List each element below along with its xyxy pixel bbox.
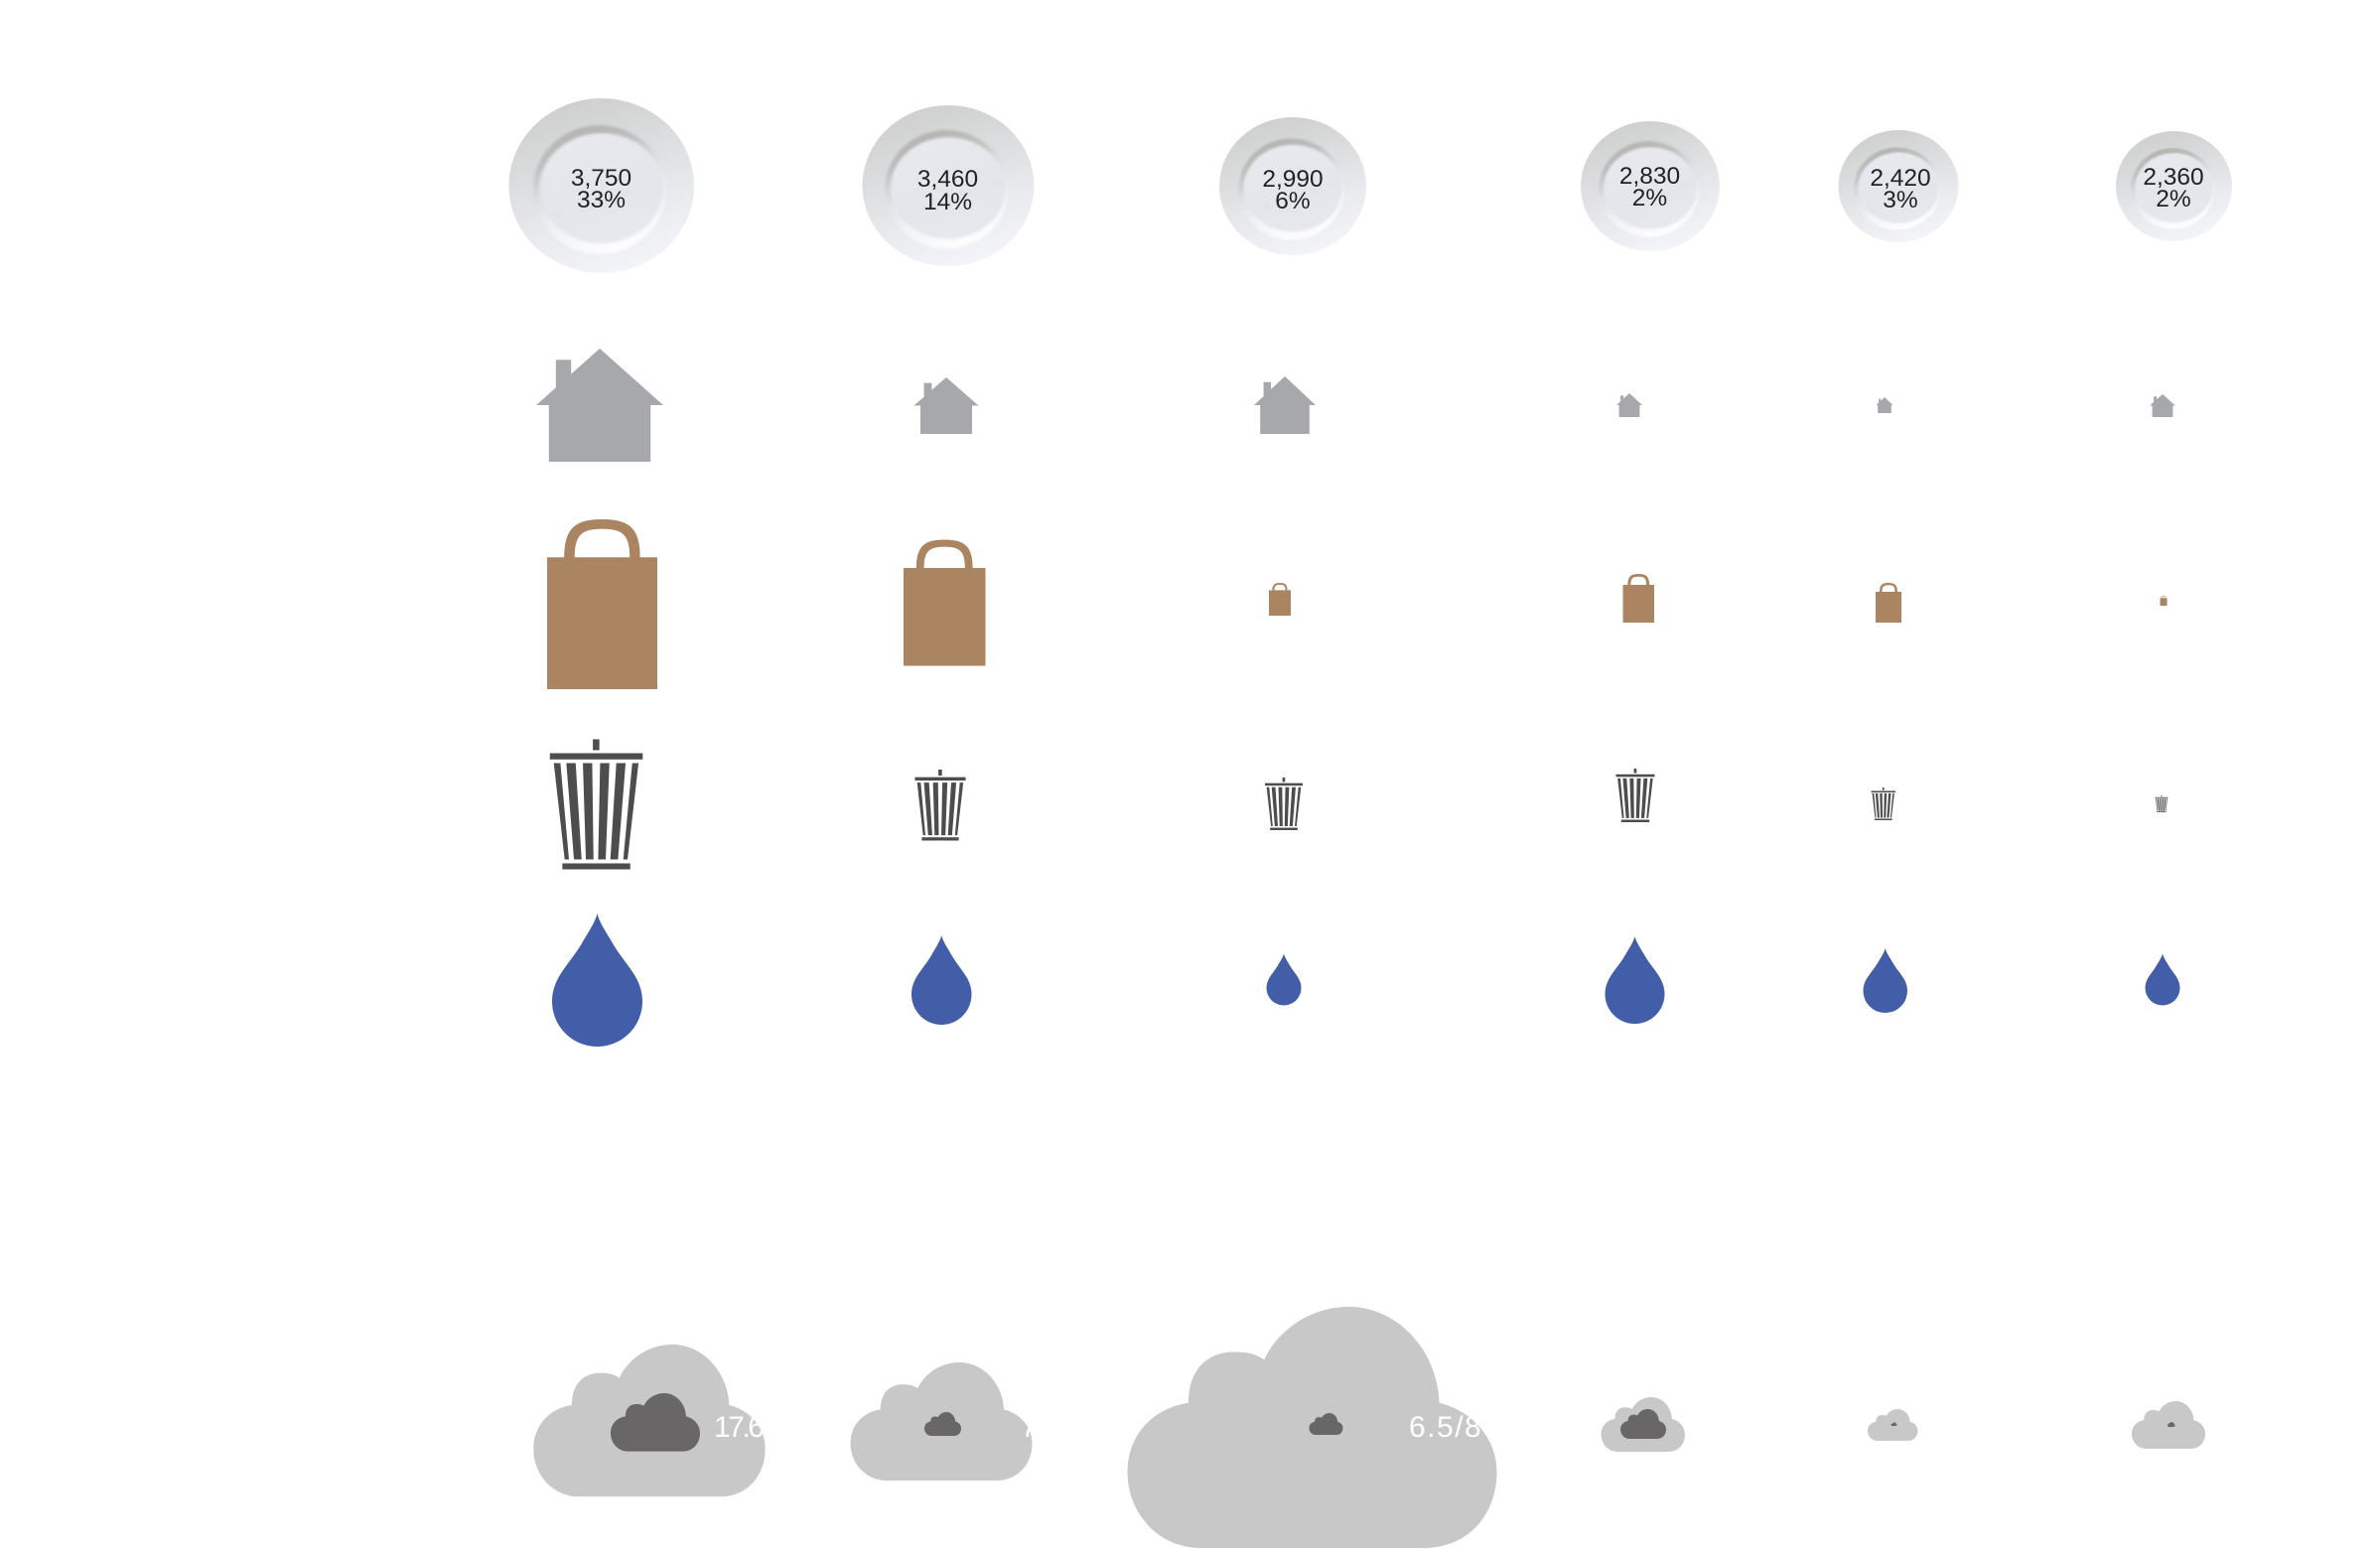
icon: trash can 6 xyxy=(2155,795,2169,812)
cloud 5 with inner cloud xyxy=(1868,1409,1918,1441)
plate: 2,990 6%: 6% xyxy=(1275,188,1311,214)
plate: 3,460 14%: 3,460 xyxy=(917,166,978,193)
icon: trash can 3 xyxy=(1265,778,1303,830)
icon: bag 5 xyxy=(1876,583,1901,623)
cloud 1 with inner cloud and value: 17.6 xyxy=(714,1411,764,1444)
icon: house 3 xyxy=(1254,376,1316,434)
plate: 2,360 2% xyxy=(2116,131,2232,241)
icon: bag 1 xyxy=(547,519,657,689)
cloud 2 with inner cloud and value: 7 xyxy=(1021,1411,1038,1444)
cloud 3 with inner cloud and value: 6.5/8 xyxy=(1409,1411,1482,1444)
icon: trash can 4 xyxy=(1616,769,1654,822)
icon: water drop 2 xyxy=(911,935,971,1025)
plate: 3,460 14%: 14% xyxy=(923,189,972,215)
icon: water drop 5 xyxy=(1863,948,1907,1013)
row: house icons xyxy=(536,349,2175,462)
cloud 2 with inner cloud and value xyxy=(850,1362,1038,1481)
cloud 1 with inner cloud and value xyxy=(533,1345,766,1496)
plate: 2,360 2%: 2% xyxy=(2156,186,2191,212)
plate: 2,420 3%: 3% xyxy=(1883,187,1918,213)
icon: trash can 5 xyxy=(1871,787,1895,820)
plate: 3,750 33% xyxy=(508,98,694,273)
icon: bag 3 xyxy=(1269,583,1291,616)
icon: house 5 xyxy=(1877,397,1892,413)
icon: house 4 xyxy=(1616,393,1642,417)
cloud 3 with inner cloud and value xyxy=(1128,1307,1497,1548)
icon: house 1 xyxy=(536,349,663,462)
plate: 2,360 2%: 2,360 xyxy=(2143,164,2204,191)
plate: 2,420 3% xyxy=(1839,130,1958,242)
plate: 3,460 14% xyxy=(862,105,1035,266)
plate: 3,750 33%: 33% xyxy=(577,187,626,213)
row: shopping bag icons xyxy=(547,519,2167,689)
icon: water drop 4 xyxy=(1605,936,1664,1024)
icon: water drop 3 xyxy=(1267,953,1301,1005)
plate: 3,750 33%: 3,750 xyxy=(571,165,631,192)
plate: 2,990 6%: 2,990 xyxy=(1262,166,1324,193)
plate: 2,830 2%: 2,830 xyxy=(1619,163,1680,190)
row: trash can icons xyxy=(550,739,2169,870)
cloud 6 with inner cloud xyxy=(2132,1401,2205,1449)
icon: house 2 xyxy=(913,377,979,434)
icon: bag 2 xyxy=(904,540,985,665)
row: water drop icons xyxy=(552,914,2180,1047)
plate: 2,420 3%: 2,420 xyxy=(1870,165,1931,192)
icon: water drop 6 xyxy=(2145,953,2180,1005)
row: plates with calories and percentages xyxy=(508,98,2232,273)
plate: 2,830 2% xyxy=(1581,121,1720,251)
icon: bag 6 xyxy=(2161,596,2167,606)
cloud 4 with inner cloud xyxy=(1601,1397,1685,1452)
icon: house 6 xyxy=(2150,394,2175,417)
icon: water drop 1 xyxy=(552,914,642,1047)
icon: trash can 1 xyxy=(550,739,642,870)
row: carbon footprint clouds xyxy=(533,1307,2205,1548)
icon: trash can 2 xyxy=(915,770,965,840)
plate: 2,830 2%: 2% xyxy=(1632,185,1667,212)
plate: 2,990 6% xyxy=(1219,117,1366,255)
icon: bag 4 xyxy=(1622,574,1654,623)
